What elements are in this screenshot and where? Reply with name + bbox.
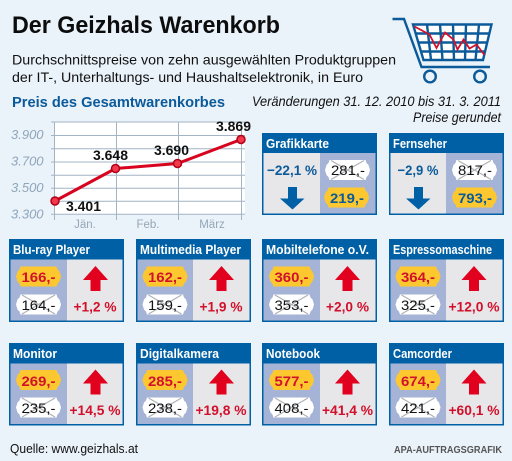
card: Blu-ray Player: 166,- (22, 269, 56, 285)
x axis labels: Feb. (136, 219, 160, 231)
subtitle: der IT-, Unterhaltungs- und Haushaltselektronik, in Euro (12, 69, 363, 85)
card: Camcorder: 674,- (401, 373, 435, 389)
chart heading: Preis des Gesamtwarenkorbes (12, 94, 225, 111)
card: Espressomaschine (389, 239, 504, 322)
x axis labels (74, 219, 225, 231)
y axis labels: 3.900 (11, 127, 44, 142)
data labels: 3.869 (216, 119, 251, 134)
card: Mobiltelefone o.V. (262, 239, 377, 322)
card: Camcorder: Camcorder (393, 347, 452, 361)
icon: shopping cart (392, 19, 492, 82)
card: Fernseher: 817,- (458, 162, 492, 178)
card: Fernseher: Fernseher (393, 137, 447, 151)
card: Blu-ray Player: 164,- (22, 297, 56, 313)
card: Multimedia Player: Multimedia Player (140, 243, 241, 257)
card: Digitalkamera: 238,- (148, 400, 182, 416)
card: Monitor: 235,- (22, 400, 56, 416)
card: Mobiltelefone o.V.: Mobiltelefone o.V. (266, 243, 369, 257)
card: Monitor: +14,5 % (70, 402, 121, 418)
y axis labels (11, 127, 44, 222)
card: Digitalkamera: Digitalkamera (140, 347, 220, 361)
period note (252, 94, 502, 125)
card: Camcorder: +60,1 % (448, 402, 500, 418)
x axis labels: März (199, 219, 225, 231)
y axis labels: 3.700 (11, 154, 44, 168)
card: Grafikkarte: −22,1 % (267, 162, 318, 178)
card: Multimedia Player (136, 239, 251, 322)
card: Digitalkamera: +19,8 % (196, 402, 247, 418)
card: Blu-ray Player: Blu-ray Player (13, 243, 90, 257)
card: Espressomaschine: Espressomaschine (393, 243, 492, 257)
line chart (11, 119, 251, 231)
card: Camcorder: 421,- (401, 400, 435, 416)
card: Mobiltelefone o.V.: 353,- (274, 297, 309, 313)
period note: Veränderungen 31. 12. 2010 bis 31. 3. 2011 (252, 94, 501, 109)
card: Multimedia Player: +1,9 % (200, 298, 243, 314)
source note: Quelle: www.geizhals.at (10, 441, 138, 456)
card: Grafikkarte: 281,- (331, 162, 365, 178)
card: Mobiltelefone o.V.: +2,0 % (326, 298, 370, 314)
card: Camcorder (389, 343, 504, 426)
card: Notebook: 408,- (274, 400, 309, 416)
title: Der Geizhals Warenkorb (12, 12, 280, 39)
card: Fernseher: −2,9 % (398, 162, 439, 178)
card: Fernseher (389, 133, 504, 215)
card: Monitor: 269,- (22, 373, 56, 389)
card: Grafikkarte: 219,- (330, 190, 364, 206)
card: Blu-ray Player: +1,2 % (74, 298, 117, 314)
card: Espressomaschine: 364,- (401, 269, 435, 285)
card: Fernseher: 793,- (458, 190, 492, 206)
data labels: 3.648 (93, 148, 128, 163)
card: Espressomaschine: 325,- (401, 297, 435, 313)
card: Digitalkamera: 285,- (148, 373, 182, 389)
subtitle (12, 52, 396, 85)
card: Monitor: Monitor (13, 347, 57, 361)
period note: Preise gerundet (413, 110, 502, 125)
card: Espressomaschine: +12,0 % (448, 298, 500, 314)
card: Grafikkarte: Grafikkarte (266, 137, 329, 151)
card: Notebook: 577,- (274, 373, 309, 389)
card: Notebook: Notebook (266, 347, 320, 361)
card: Notebook: +41,4 % (322, 402, 374, 418)
card: Multimedia Player: 162,- (148, 269, 182, 285)
subtitle: Durchschnittspreise von zehn ausgewählten Produktgruppen (12, 52, 396, 68)
x axis labels: Jän. (74, 219, 96, 231)
card: Multimedia Player: 159,- (148, 297, 182, 313)
data line (51, 136, 245, 205)
data labels (66, 119, 251, 214)
card: Mobiltelefone o.V.: 360,- (274, 269, 309, 285)
data labels: 3.690 (154, 143, 189, 158)
y axis labels: 3.500 (11, 180, 44, 195)
card: Digitalkamera (136, 343, 251, 426)
card: Grafikkarte (262, 133, 377, 215)
y axis labels: 3.300 (11, 206, 44, 222)
card: Blu-ray Player (9, 239, 124, 322)
data labels: 3.401 (66, 199, 101, 214)
card: Notebook (262, 343, 377, 426)
card: Monitor (9, 343, 124, 426)
